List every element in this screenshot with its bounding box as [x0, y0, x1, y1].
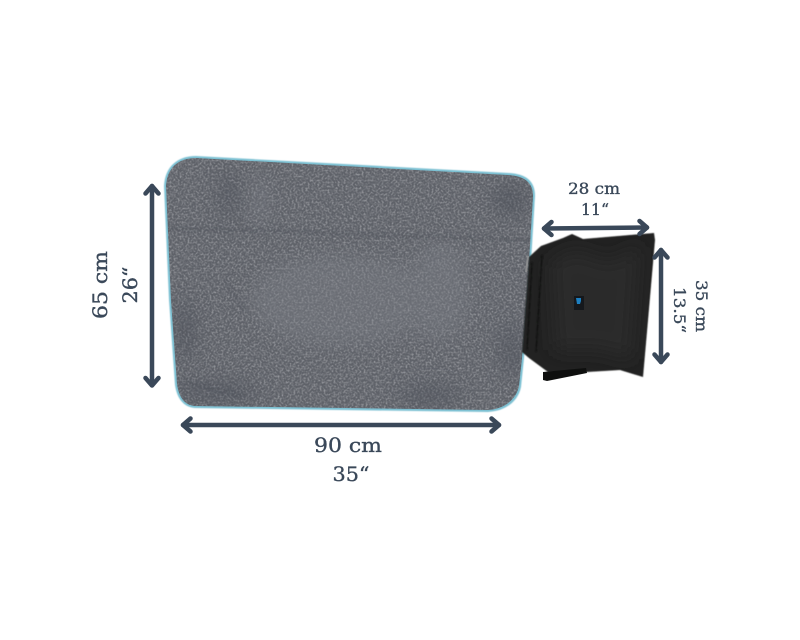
photo: grey fleece mat with blue trim: [164, 156, 535, 412]
photo: black storage bag: [522, 233, 655, 381]
label: bag height 35 cm: 35 cm: [692, 280, 710, 332]
label: bag width 28 cm: 28 cm: [568, 180, 620, 198]
arrow: mat width: [183, 418, 499, 432]
logo patch on bag: [574, 296, 584, 310]
label: mat height 26 inches: 26“: [118, 266, 142, 304]
label: bag height 13.5 inches: 13.5“: [670, 287, 688, 333]
label: mat width 35 inches: 35“: [332, 462, 370, 486]
arrow: bag height: [654, 250, 668, 362]
arrow: bag width: [544, 221, 647, 235]
arrow: mat height: [146, 186, 158, 386]
label: mat height 65 cm: 65 cm: [88, 251, 112, 319]
label: bag width 11 inches: 11“: [581, 201, 609, 219]
label: mat width 90 cm: 90 cm: [314, 433, 382, 457]
